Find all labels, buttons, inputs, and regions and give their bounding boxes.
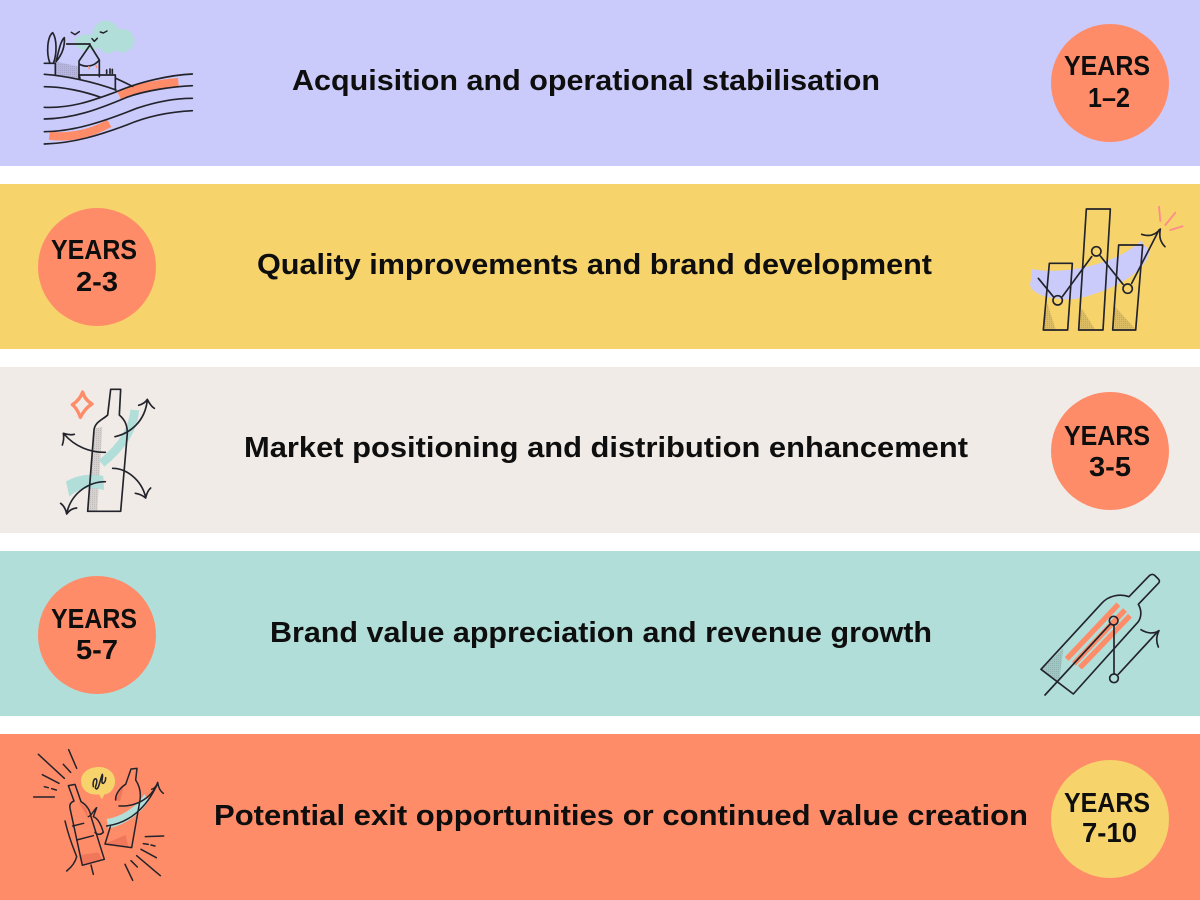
icon: farmhouse on hills (44, 21, 192, 144)
badge: years 2-3 (38, 208, 156, 326)
icon: tilted bottle with arrow (1041, 574, 1159, 695)
panel: market band (0, 367, 1200, 533)
badge: years 7-10 (1051, 760, 1169, 878)
badge: years 3-5: 3-5 (1089, 451, 1131, 482)
heading: exit: Potential exit opportunities or continued value creation (214, 800, 1028, 832)
heading: quality: Quality improvements and brand development (257, 249, 932, 281)
icon: bottle with arrows (61, 389, 154, 514)
badge: years 7-10: 7-10 (1082, 817, 1137, 848)
heading: acquisition: Acquisition and operational stabilisation (292, 65, 880, 97)
badge: years 2-3: YEARS (51, 234, 137, 265)
badge: years 1-2: YEARS (1064, 50, 1150, 81)
badge: years 5-7: 5-7 (76, 634, 118, 665)
badge: years 3-5 (1051, 392, 1169, 510)
panel: brand value band (0, 551, 1200, 716)
badge: years 5-7 (38, 576, 156, 694)
panel: acquisition band (0, 0, 1200, 166)
heading: market: Market positioning and distribution enhancement (244, 432, 968, 464)
badge: years 1-2 (1051, 24, 1169, 142)
badge: years 1-2: 1–2 (1088, 82, 1130, 113)
badge: years 3-5: YEARS (1064, 420, 1150, 451)
panel: exit band (0, 734, 1200, 900)
heading: brand value: Brand value appreciation and revenue growth (270, 617, 932, 649)
icon: clinking bottles (34, 750, 164, 880)
badge: years 2-3: 2-3 (76, 266, 118, 297)
panel: quality band (0, 184, 1200, 349)
badge: years 5-7: YEARS (51, 603, 137, 634)
badge: years 7-10: YEARS (1064, 787, 1150, 818)
icon: rising bar chart (1030, 207, 1182, 330)
